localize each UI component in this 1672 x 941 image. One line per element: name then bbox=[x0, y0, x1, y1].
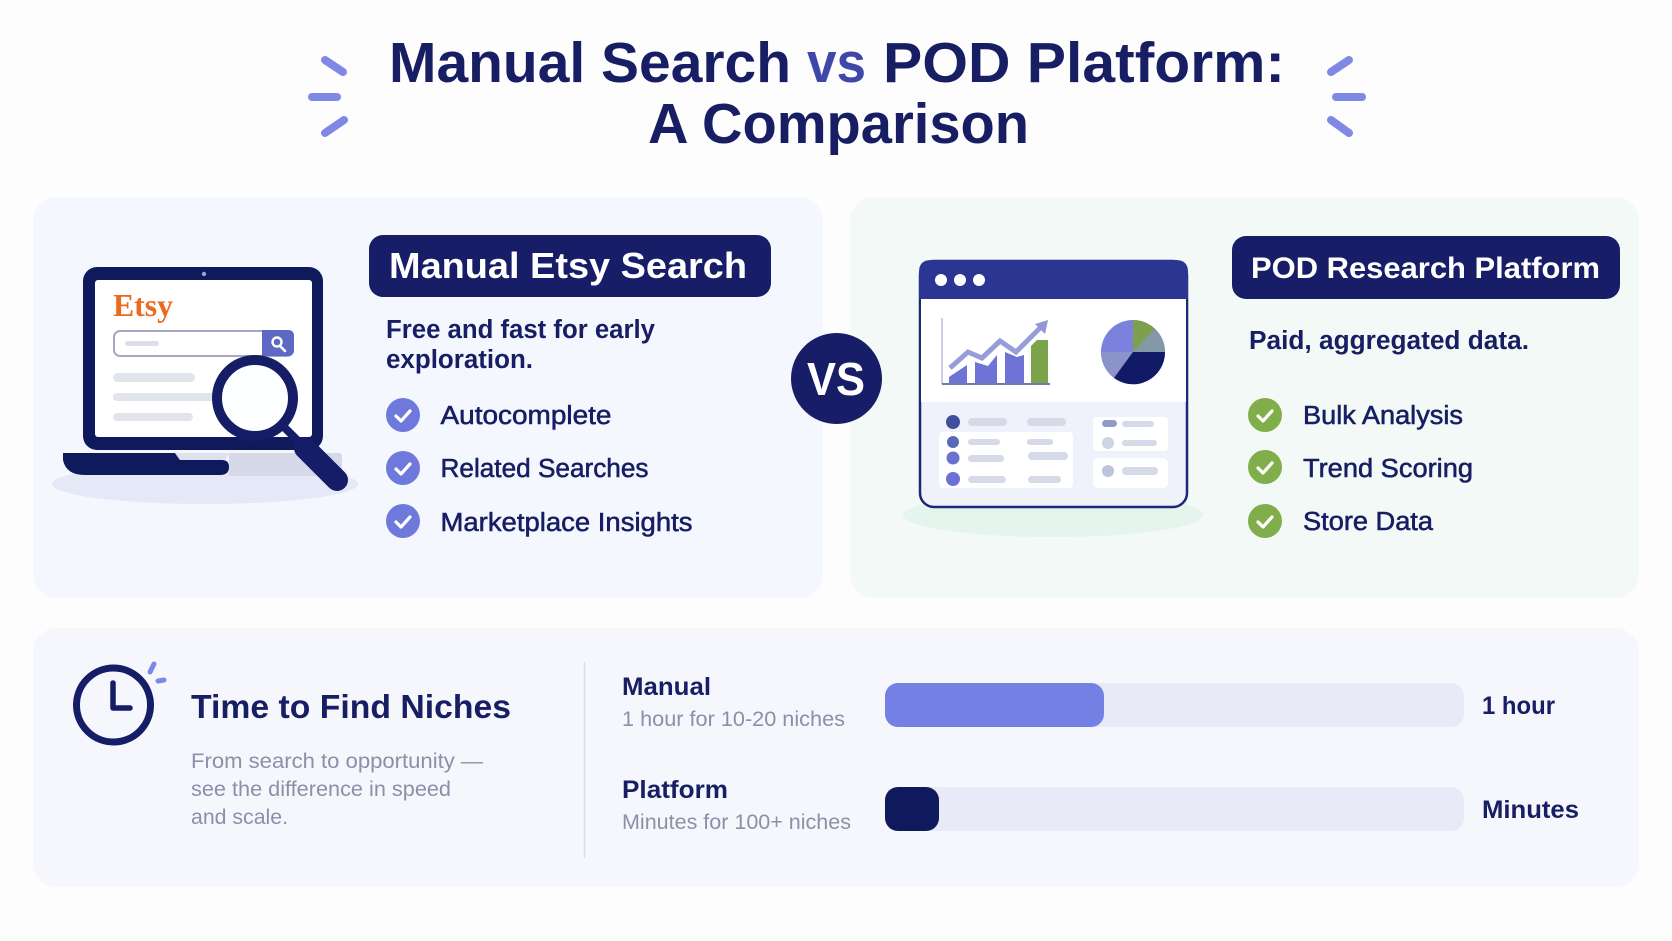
text block: speed and scale bbox=[191, 749, 483, 829]
heading: time to find niches: Time to Find Niches bbox=[191, 688, 511, 725]
title: Manual Search bbox=[389, 31, 791, 95]
title: POD Platform: bbox=[883, 31, 1285, 95]
panel: manual Etsy search bbox=[33, 197, 823, 598]
pie chart bbox=[1101, 320, 1165, 384]
title: A Comparison bbox=[648, 92, 1029, 156]
text block: speed and scale: From search to opportunity — bbox=[191, 749, 483, 773]
row: manual time bar: Manual bbox=[622, 673, 711, 701]
row: platform time bar: Minutes bbox=[1482, 796, 1579, 824]
checklist: platform features bbox=[1248, 398, 1473, 538]
badge: POD Research Platform bbox=[1232, 236, 1620, 299]
data tables bbox=[939, 415, 1168, 488]
illustration: laptop with Etsy search and magnifier bbox=[52, 267, 358, 504]
checklist: manual features: Related Searches bbox=[440, 455, 648, 483]
left title sparks bbox=[312, 60, 344, 133]
title bbox=[389, 31, 1285, 156]
VS badge: VS bbox=[807, 353, 865, 405]
text block: speed and scale: and scale. bbox=[191, 805, 288, 829]
illustration: analytics dashboard window bbox=[903, 260, 1203, 537]
description: manual search bbox=[386, 316, 656, 374]
icon: clock bbox=[76, 664, 164, 742]
panel: time to find niches bbox=[33, 628, 1639, 887]
line and bar chart bbox=[942, 318, 1050, 384]
description: manual search: exploration. bbox=[386, 346, 533, 374]
title: vs bbox=[807, 31, 866, 95]
text block: speed and scale: see the difference in speed bbox=[191, 777, 451, 801]
description: manual search: Free and fast for early bbox=[386, 316, 656, 344]
row: manual time bar bbox=[622, 673, 1555, 731]
right title sparks bbox=[1331, 60, 1362, 133]
badge: Manual Etsy Search bbox=[369, 235, 771, 297]
row: platform time bar bbox=[622, 776, 1579, 834]
checklist: platform features: Store Data bbox=[1303, 508, 1434, 536]
row: platform time bar: Minutes for 100+ niches bbox=[622, 810, 851, 834]
badge: POD Research Platform: POD Research Platform bbox=[1251, 252, 1600, 285]
checklist: manual features: Marketplace Insights bbox=[440, 509, 692, 537]
row: manual time bar: 1 hour for 10-20 niches bbox=[622, 707, 845, 731]
checklist: manual features bbox=[386, 398, 692, 538]
panel: POD research platform bbox=[850, 197, 1639, 598]
VS badge bbox=[791, 333, 882, 424]
checklist: platform features: Trend Scoring bbox=[1303, 455, 1473, 483]
checklist: platform features: Bulk Analysis bbox=[1303, 402, 1463, 430]
row: manual time bar: 1 hour bbox=[1482, 692, 1555, 720]
checklist: manual features: Autocomplete bbox=[440, 402, 612, 430]
description: platform: Paid, aggregated data. bbox=[1249, 327, 1529, 355]
row: platform time bar: Platform bbox=[622, 776, 728, 804]
badge: Manual Etsy Search: Manual Etsy Search bbox=[389, 245, 747, 286]
illustration: laptop with Etsy search and magnifier: Etsy bbox=[113, 287, 173, 323]
